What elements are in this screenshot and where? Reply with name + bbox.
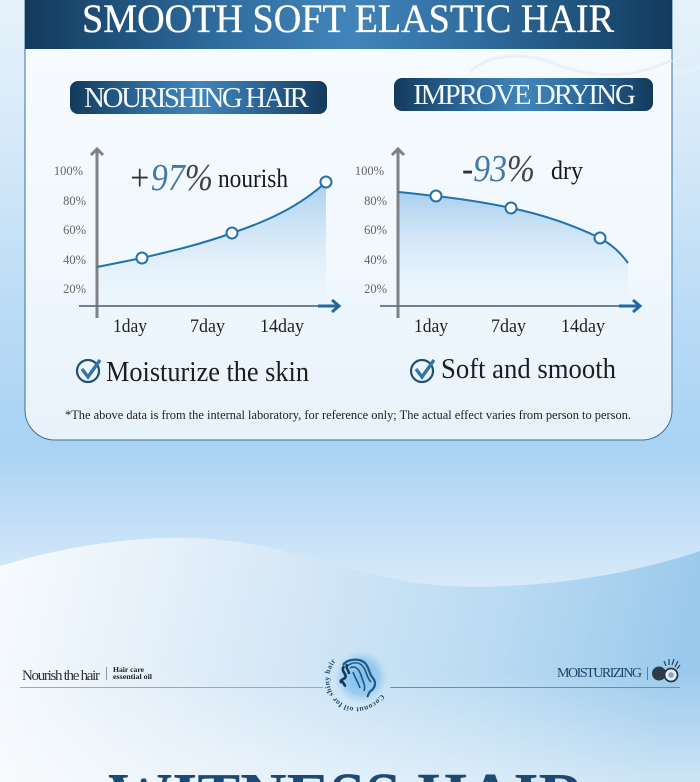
y axis labels: 20% [63,282,86,296]
icon: check badge [77,360,100,382]
footnote: *The above data is from the internal laboratory, for reference only; The actual effect varies from person to person. [65,408,631,422]
circular text: Coconut oil for shiny hair [324,659,384,712]
divider line left [20,686,323,688]
y axis labels: 80% [364,194,387,208]
y axis labels: 100% [355,164,384,178]
x axis labels: 14day [260,316,304,337]
data markers [136,176,332,264]
background: lower white wave [0,538,700,782]
trend line [97,182,326,267]
title banner [25,0,672,49]
background: upper blue field [0,0,700,600]
chart: nourish line chart [54,149,339,337]
callout -93% dry: -93% [462,148,535,190]
x axis labels: 1day [414,316,448,337]
y axis labels: 20% [364,282,387,296]
heading pill: improve drying: IMPROVE DRYING [413,79,636,111]
heading pill: nourishing hair: NOURISHING HAIR [84,82,310,114]
x axis arrow [79,300,339,312]
icon: woman with flowing hair [341,660,375,697]
benefit: soft and smooth: Soft and smooth [441,354,616,385]
x axis labels: 14day [561,316,605,337]
y axis labels [355,164,387,296]
y axis labels: 40% [63,253,86,267]
panel: results card [25,0,672,440]
x axis labels: 7day [190,316,225,337]
small divider [646,667,648,680]
x axis labels: 1day [113,316,147,337]
brand text: hair care essential oil [113,665,152,681]
trend line [398,192,628,263]
chart: dryness line chart [355,148,640,337]
y axis labels: 40% [364,253,387,267]
data markers [430,190,606,244]
y axis labels: 100% [54,164,83,178]
small divider [106,667,108,680]
callout +97% nourish [128,157,288,199]
x axis labels [414,316,605,337]
logo: hair silhouette seal [324,652,386,712]
brand text: moisturizing: MOISTURIZING [557,666,642,681]
faint silk behind card text [470,56,672,75]
callout +97% nourish: nourish [218,164,288,193]
area under curve [97,182,326,306]
icon: check badge [411,360,434,382]
x axis labels: 7day [491,316,526,337]
callout +97% nourish: +97% [128,157,213,199]
brand text: nourish the hair: Nourish the hair [22,668,100,684]
y axis labels: 60% [63,223,86,237]
brand strip [20,652,680,712]
benefit: moisturize the skin: Moisturize the skin [106,357,309,388]
y axis arrow [392,149,404,318]
y axis labels: 60% [364,223,387,237]
brand text: hair care essential oil: essential oil [113,672,152,681]
brand text: hair care essential oil: Hair care [113,665,145,674]
x axis labels [113,316,304,337]
y axis arrow [91,149,103,318]
icon: coconut [652,659,680,682]
y axis labels [54,164,86,296]
area under curve [398,192,628,306]
decorative silk wisps at right [672,46,700,73]
y axis labels: 80% [63,194,86,208]
x axis arrow [380,300,640,312]
divider line right [390,686,680,688]
callout -93% dry [462,148,583,190]
callout -93% dry: dry [551,156,583,185]
